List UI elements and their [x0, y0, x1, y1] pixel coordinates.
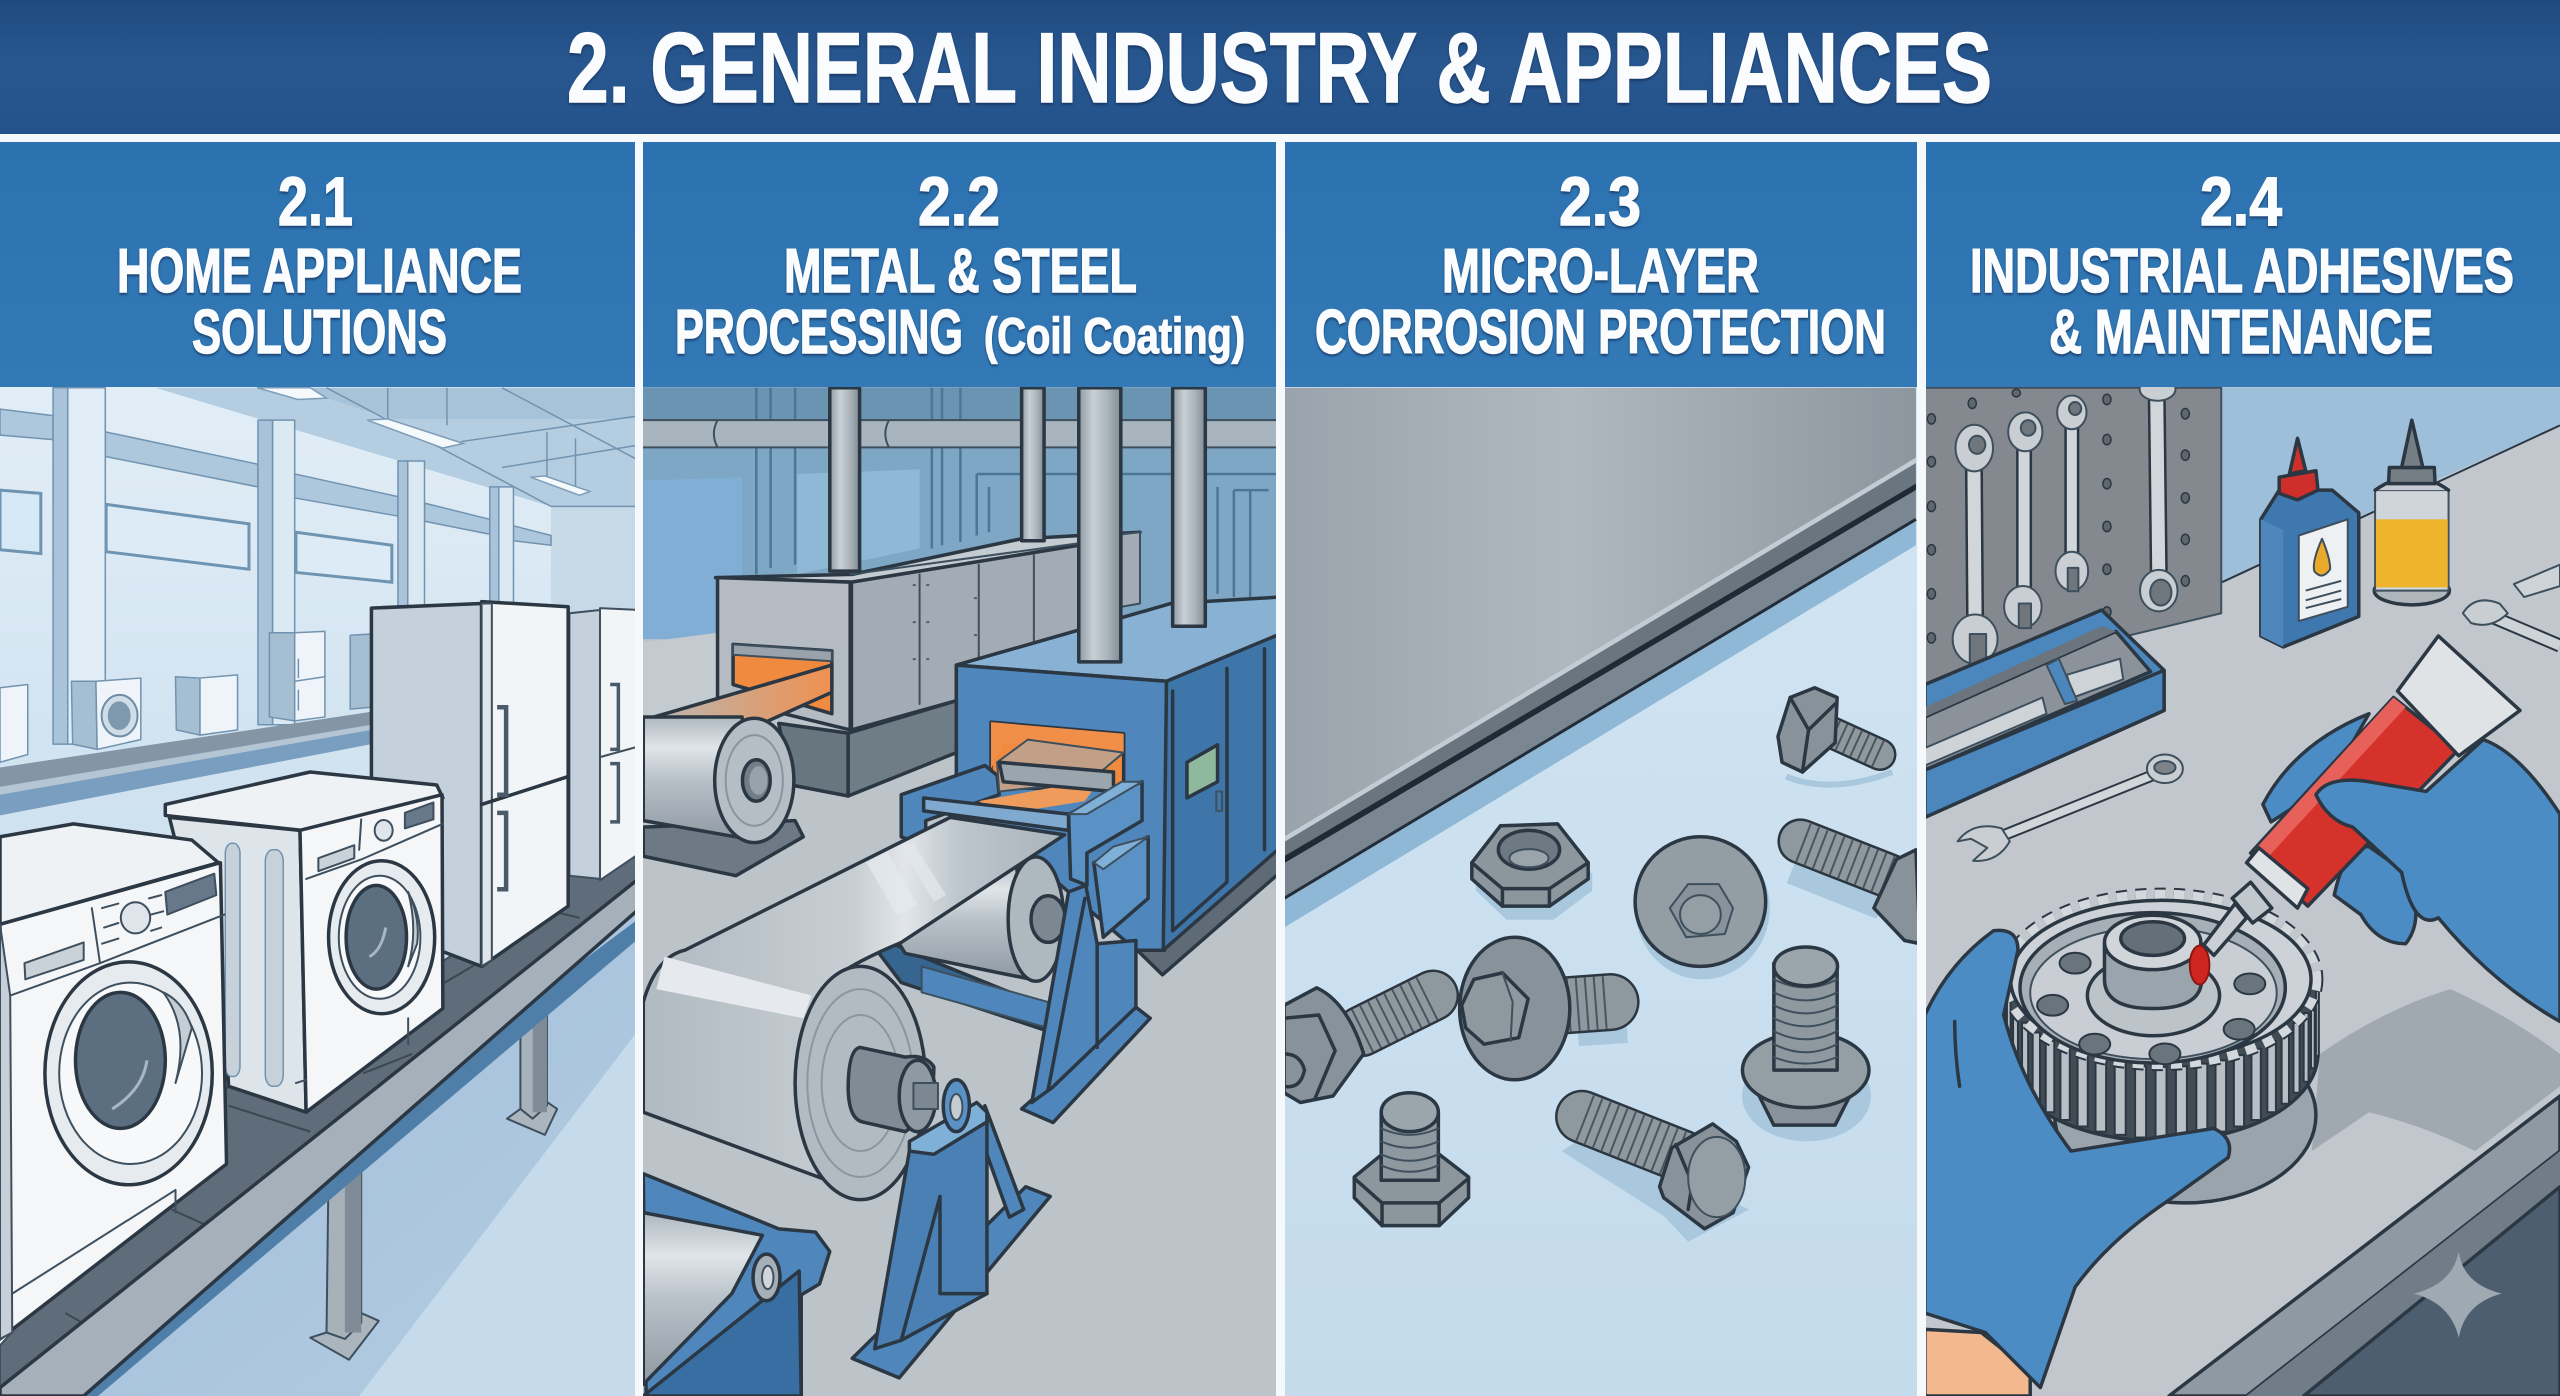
hanging wrenches: [1953, 377, 2178, 664]
panel: 2.2 heading: (Coil Coating): [984, 308, 1245, 364]
conveyor: [0, 856, 640, 1396]
background shelf: [0, 712, 371, 815]
back fingers of right hand: [2263, 714, 2416, 944]
panel: 2.4 heading: [1926, 142, 2560, 387]
illustration: corrosion-protected fasteners: [1280, 380, 1920, 1396]
large steel coil: [795, 966, 938, 1200]
table edge: [2169, 1096, 2560, 1396]
panel: 2.3 heading: 2.3: [1559, 163, 1641, 240]
panel: 2.1 heading: SOLUTIONS: [192, 298, 447, 367]
grey curing oven: [716, 532, 1140, 796]
fridge front: [371, 602, 568, 966]
fastener: flange head: [1635, 837, 1770, 979]
panel: 2.2 heading: METAL & STEEL: [784, 237, 1137, 306]
illustration: coil coating line: [640, 380, 1280, 1396]
ceiling lights: [257, 388, 590, 495]
watermark sparkle: [2414, 1252, 2502, 1338]
foreground exhaust stacks: [1079, 388, 1205, 662]
illustration: adhesive applied to gear: [1920, 377, 2560, 1396]
sheet highlights: [656, 843, 946, 1018]
exhaust stacks: [830, 388, 1044, 571]
panel: 2.4 heading: 2.4: [2200, 163, 2282, 240]
panel: 2.4 heading: & MAINTENANCE: [2049, 298, 2433, 367]
title: 2. GENERAL INDUSTRY & APPLIANCES: [567, 12, 1992, 123]
oil bottle: [2261, 438, 2359, 647]
coated steel sheet: [643, 817, 1064, 1183]
fastener: hex bolt right edge: [1792, 841, 1920, 944]
plate edge rail: [1284, 458, 1916, 928]
fastener: hex bolt top right: [1778, 688, 1892, 785]
panel: 2.2 heading: [643, 142, 1276, 387]
blue tool tray: [1925, 610, 2164, 817]
second roller: [899, 857, 1065, 981]
washing machine rear: [165, 772, 443, 1112]
gear rim teeth: [2006, 895, 2316, 1064]
panel: 2.3 heading: [1285, 142, 1917, 387]
fastener: round head bolt: [1460, 937, 1627, 1080]
overhead pipe: [640, 420, 1280, 447]
pegboard: [1925, 388, 2221, 685]
gear: [2003, 895, 2319, 1203]
fastener: bolt lower centre: [1562, 1117, 1749, 1242]
lower conveyor: [643, 1174, 830, 1396]
panel: 2.1 heading: 2.1: [278, 163, 353, 240]
table wrench: [1958, 755, 2183, 861]
panel: 2.2 heading: 2.2: [918, 163, 1000, 240]
washing machine front: [0, 824, 227, 1339]
blue support stand: [1022, 837, 1150, 1123]
illustration: home appliance factory line: [0, 380, 640, 1396]
conveyor legs: [310, 989, 557, 1360]
table tools right: [2463, 565, 2560, 646]
large coil bearing stand: [852, 1080, 1050, 1378]
small background appliances: [0, 631, 371, 762]
blue curing oven: [956, 597, 1280, 975]
table shadow: [2312, 989, 2560, 1151]
panel: 2.1 heading: HOME APPLIANCE: [117, 237, 522, 306]
roller stand and frame: [877, 740, 1142, 1031]
fastener: square head stud: [1354, 1093, 1469, 1226]
fastener: hex nut: [1472, 824, 1592, 920]
panel: 2.2 heading: PROCESSING: [675, 298, 963, 367]
gear base disc: [2055, 1028, 2316, 1203]
fastener: threaded stud with washer: [1742, 947, 1871, 1141]
grease bottle: [2374, 420, 2449, 605]
panel: 2.3 heading: MICRO-LAYER: [1442, 237, 1759, 306]
gear side teeth: [2003, 979, 2319, 1141]
title banner: [0, 0, 2560, 134]
small steel coil: [643, 665, 832, 876]
steel plate: [1284, 388, 1916, 837]
panel: 2.3 heading: CORROSION PROTECTION: [1315, 298, 1886, 367]
right hand fingers: [2316, 740, 2560, 1021]
adhesive tube: [2204, 636, 2520, 955]
panel: 2.1 heading: [0, 142, 635, 387]
left gloved hand: [1925, 930, 2230, 1396]
fastener: bolt left edge: [1284, 988, 1433, 1102]
floor: [98, 915, 635, 1396]
fridge rear: [569, 608, 640, 880]
adhesive drop: [2190, 946, 2209, 985]
